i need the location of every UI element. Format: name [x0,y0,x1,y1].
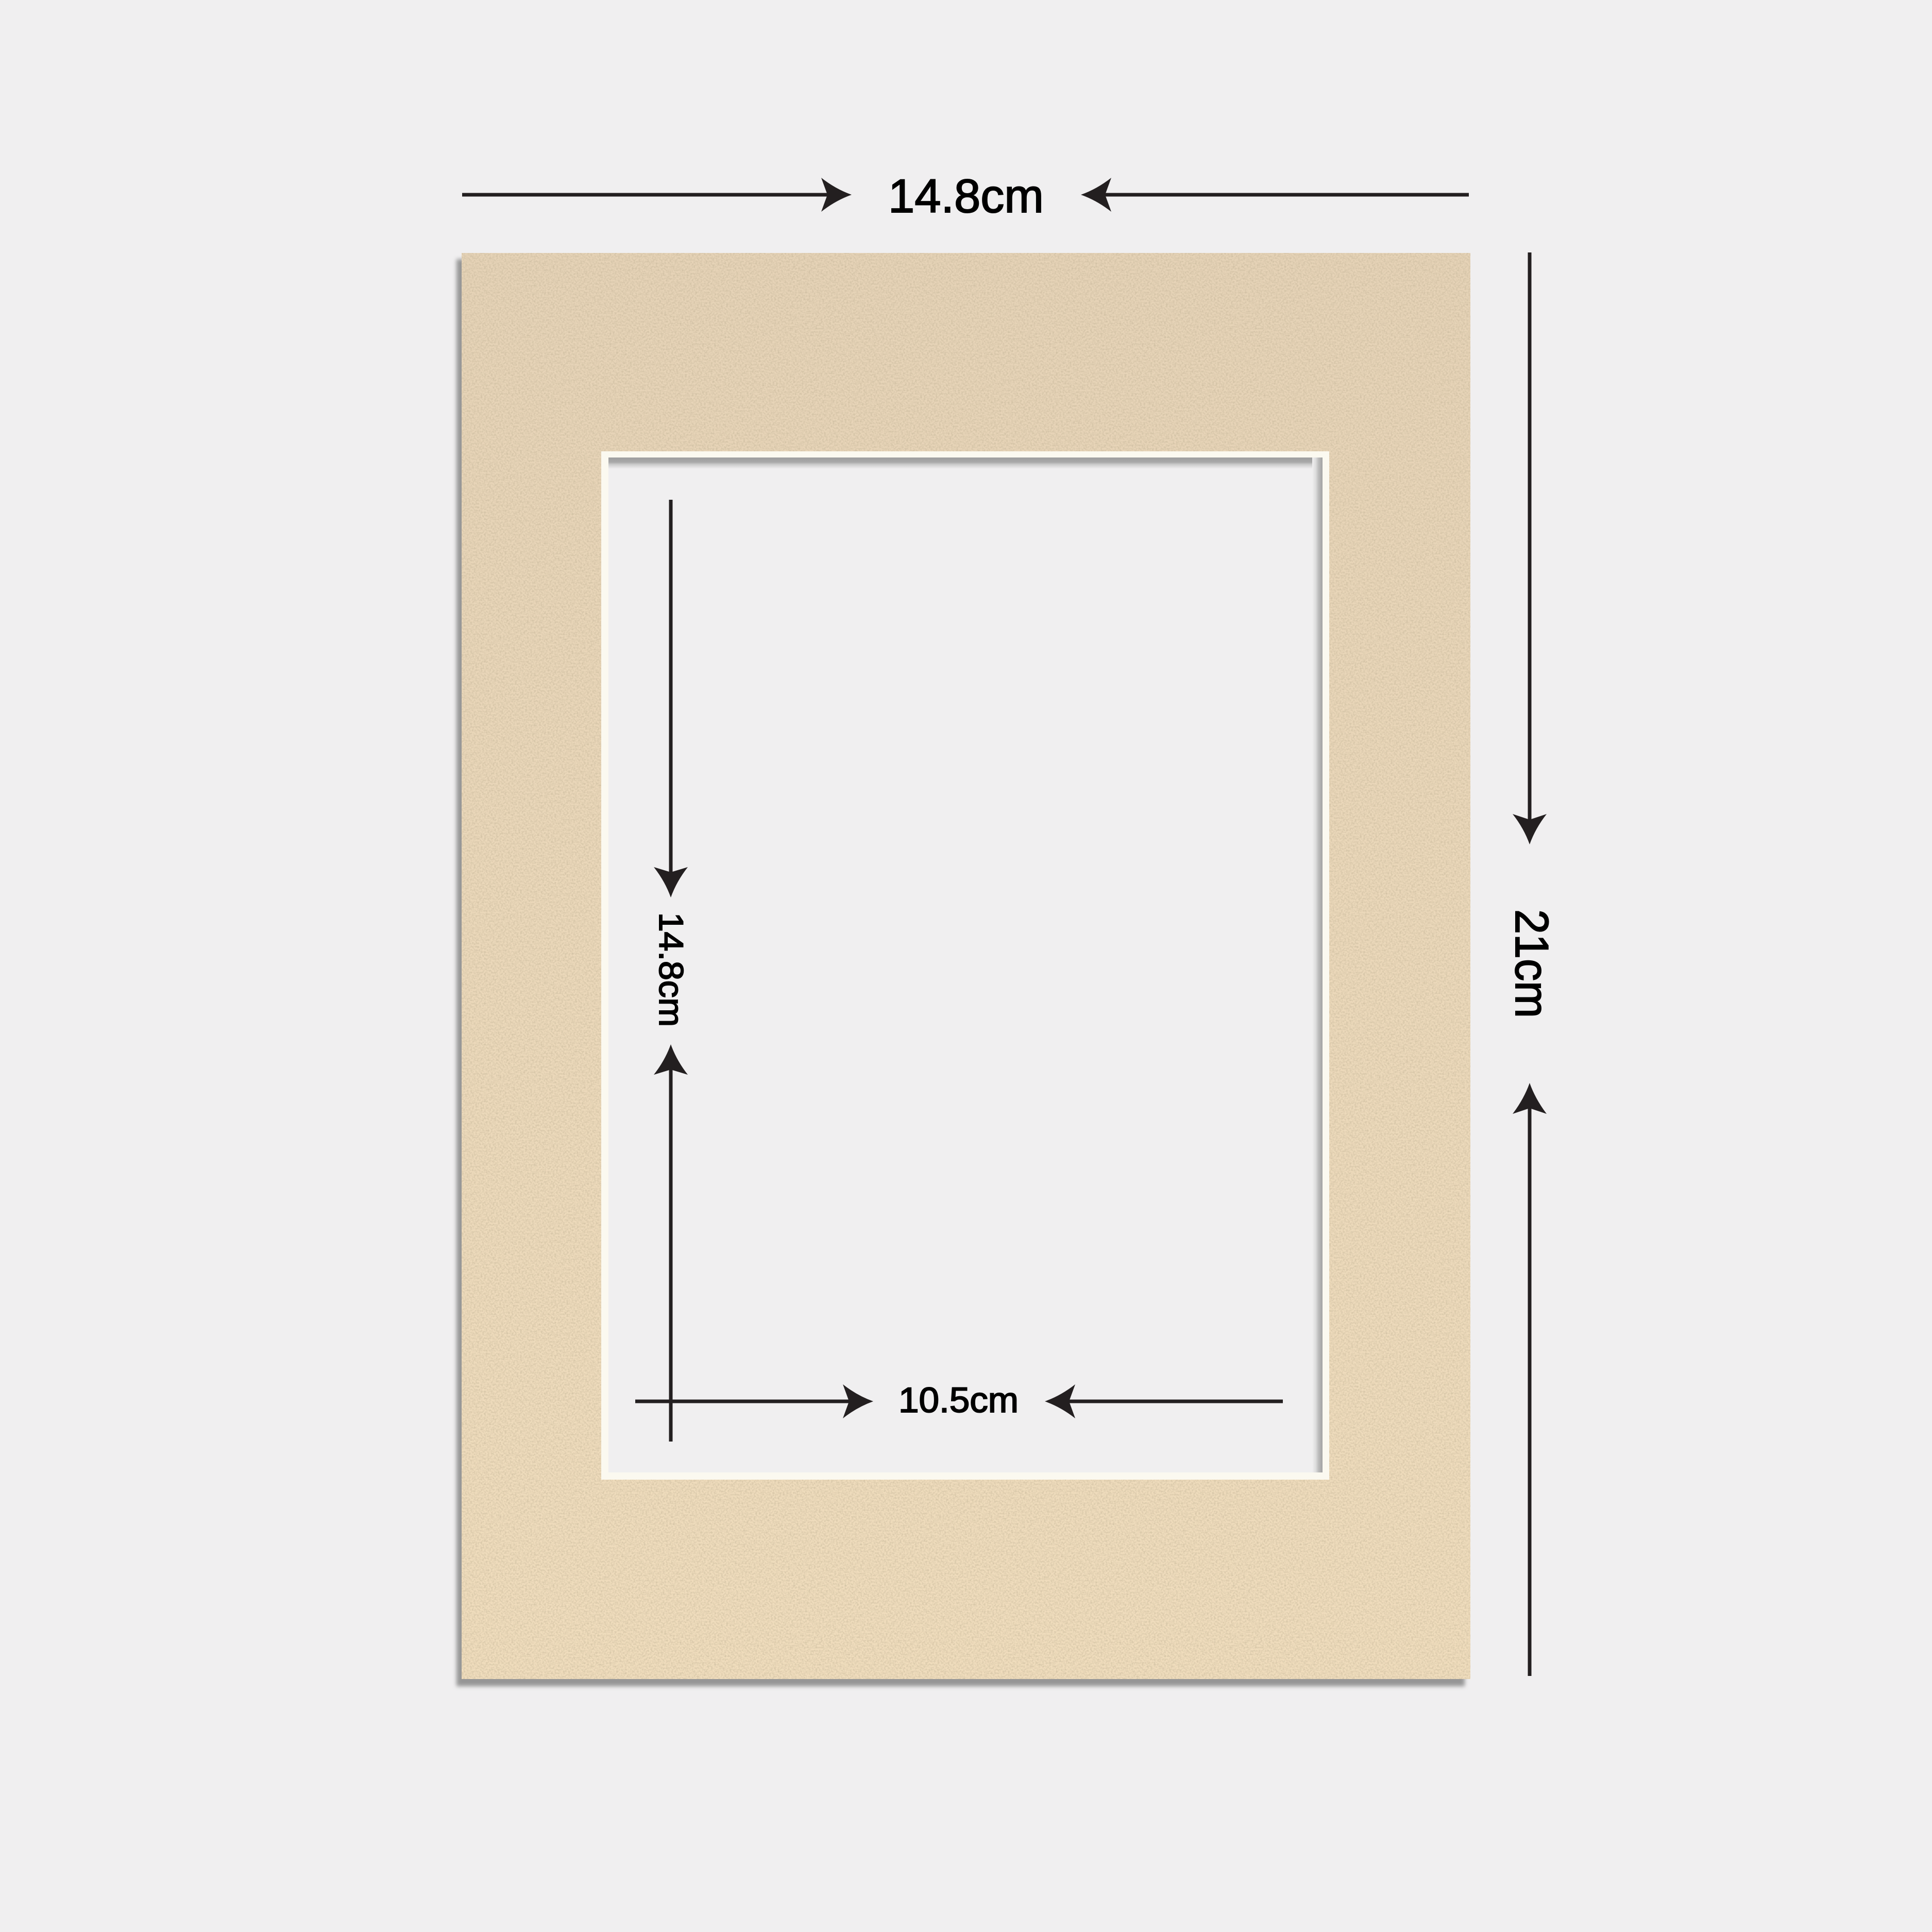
label: window width 10.5cm: 10.5cm [899,1380,1019,1420]
paper grain texture [462,253,1470,1679]
dimension diagram canvas [454,178,1549,1689]
arrow: outer height, top [1513,252,1547,844]
label: outer width 14.8cm: 14.8cm [888,170,1044,223]
arrow: window height, top [654,500,688,897]
window opening [608,457,1323,1472]
mount drop shadow [456,259,1465,1686]
arrow: window height, bottom [654,1044,688,1442]
label: outer height 21cm: 21cm [1505,909,1557,1018]
arrow: window width, right side [1045,1384,1283,1418]
label: window height 14.8cm: 14.8cm [652,912,690,1027]
mount board [462,253,1470,1679]
window right inner shadow [1312,457,1323,1472]
cream bevel edge [601,451,1329,1480]
panel: beige picture mount [456,253,1470,1686]
arrow: window width, left side [635,1384,873,1418]
arrow: outer width, right side [1081,178,1469,212]
arrow: outer height, bottom [1513,1083,1547,1676]
window top inner shadow [608,457,1323,469]
arrow: outer width, left side [462,178,852,212]
